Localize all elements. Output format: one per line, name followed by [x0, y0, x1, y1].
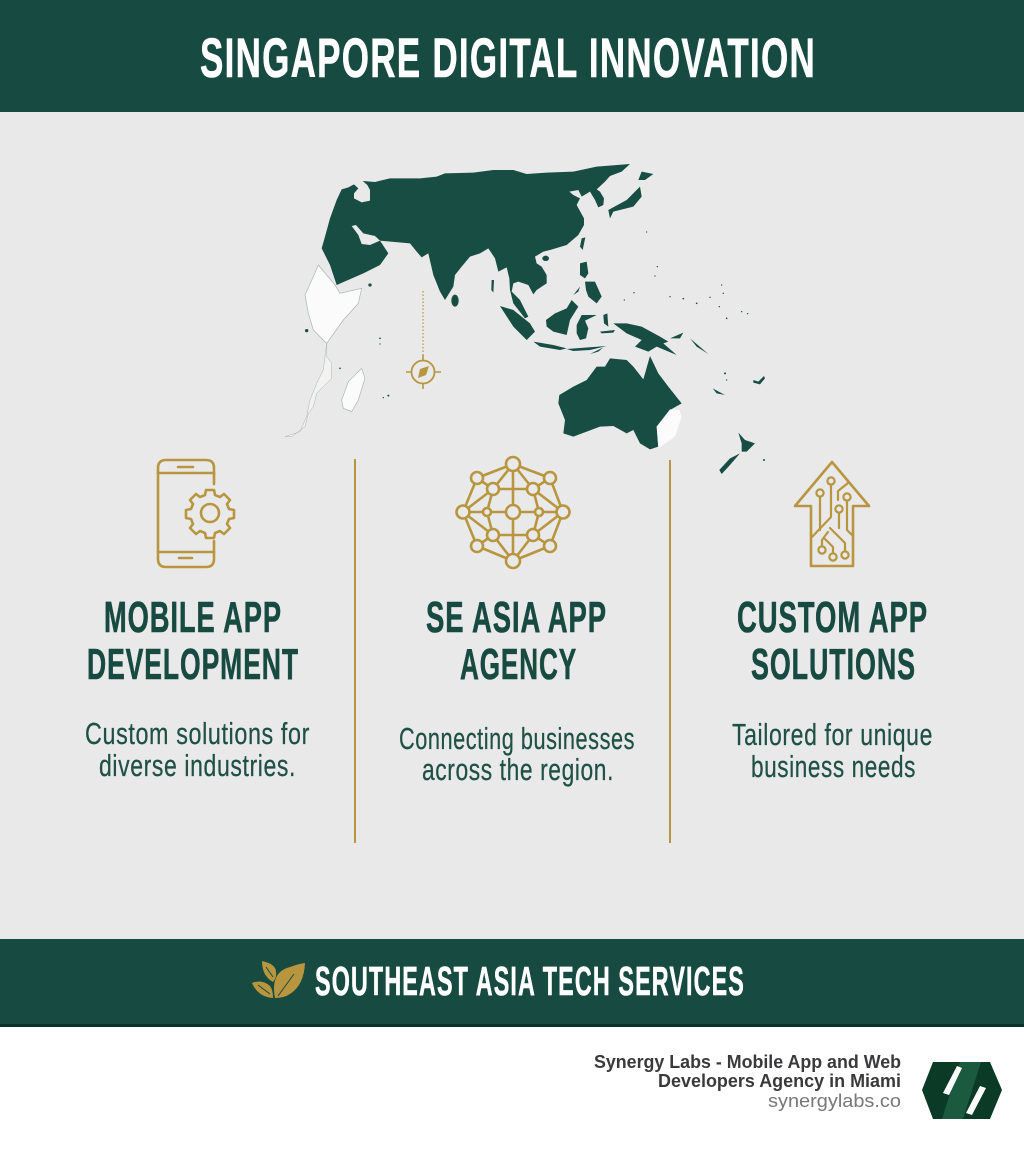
column 3 heading	[737, 593, 928, 689]
column 1 heading	[87, 593, 299, 689]
column 2 description: across the region.	[422, 752, 614, 787]
Africa coast in white	[285, 265, 365, 437]
column 3: custom app solutions	[732, 593, 933, 784]
column 3 description: business needs	[751, 749, 916, 784]
column 1 description	[85, 716, 310, 783]
New Zealand	[719, 433, 755, 474]
footer attribution text: Synergy Labs - Mobile App and Web	[594, 1052, 901, 1072]
icon: circuit arrow	[795, 462, 869, 566]
footer attribution text	[594, 1052, 901, 1111]
column 2: SE Asia app agency	[399, 593, 635, 787]
Australia	[558, 356, 682, 449]
column 1 description: Custom solutions for	[85, 716, 310, 751]
icon: gold leaves	[252, 961, 305, 998]
column 2 description	[399, 721, 635, 787]
column divider left	[354, 459, 356, 843]
icon: Synergy Labs logo	[922, 1062, 1002, 1119]
Hainan island	[542, 256, 549, 261]
locator pin: dotted line and compass	[406, 291, 441, 389]
Asia landmass	[322, 164, 630, 318]
icon: phone with gear	[158, 460, 234, 567]
column 1 heading: MOBILE APP	[104, 593, 282, 642]
column 2 heading: AGENCY	[460, 640, 577, 689]
footer white strip	[0, 1027, 1024, 1154]
column 1 description: diverse industries.	[99, 748, 296, 783]
icon: network globe	[456, 457, 570, 568]
islands of Southeast Asia	[305, 172, 765, 461]
column 1 heading: DEVELOPMENT	[87, 640, 299, 689]
column 1: mobile app development	[85, 593, 310, 783]
column 3 description	[732, 717, 933, 784]
column 2 description: Connecting businesses	[399, 721, 635, 756]
map of Asia-Pacific	[285, 164, 765, 474]
footer attribution text: Developers Agency in Miami	[658, 1071, 901, 1091]
header banner	[0, 0, 1024, 112]
column 3 description: Tailored for unique	[732, 717, 933, 752]
column 2 heading	[426, 593, 607, 689]
column divider right	[669, 460, 671, 843]
footer attribution text: synergylabs.co	[768, 1091, 901, 1111]
eastern Australia highlight	[657, 409, 682, 448]
Persian Gulf	[352, 225, 380, 245]
column 2 heading: SE ASIA APP	[426, 593, 607, 642]
bottom banner	[0, 939, 1024, 1027]
column 3 heading: SOLUTIONS	[751, 640, 916, 689]
